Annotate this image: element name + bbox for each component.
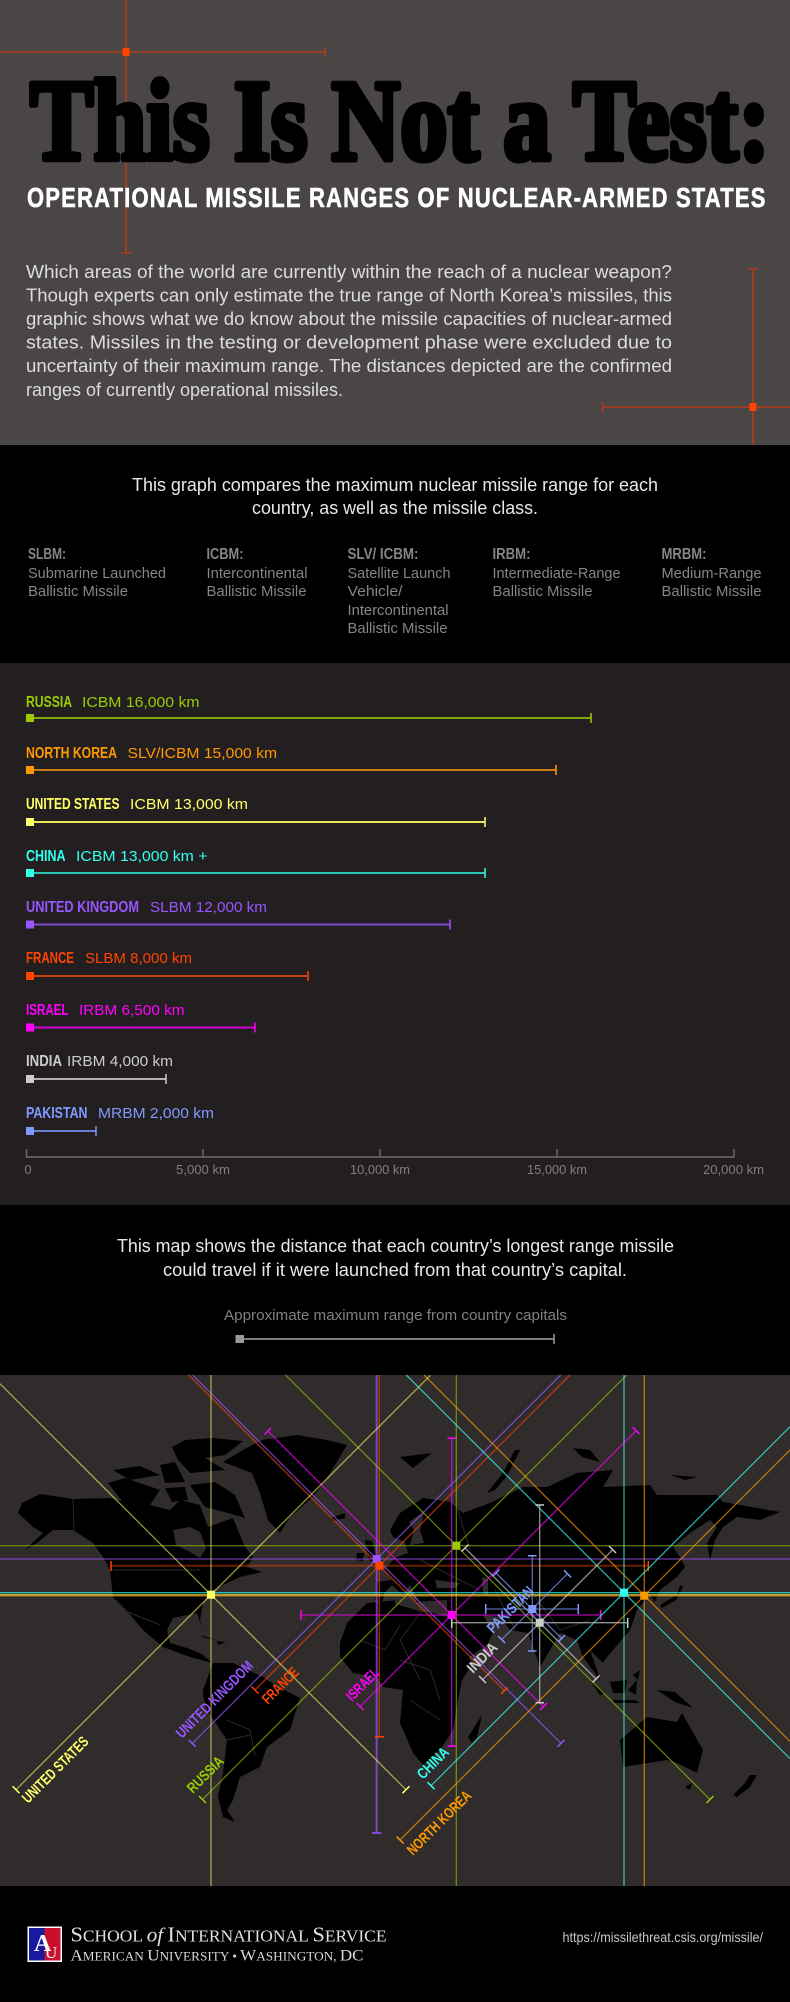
country labels: UNITED STATES [19, 1733, 92, 1807]
country labels: CHINA [414, 1744, 453, 1783]
bar: Pakistan: PAKISTAN [26, 1105, 88, 1122]
bar: India [26, 1053, 173, 1084]
chart axis: 5,000 km [176, 1162, 230, 1177]
range lines: Pakistan [486, 1556, 578, 1651]
bar: China: CHINA [26, 848, 66, 865]
bar: India: INDIA [26, 1053, 62, 1070]
bar: United Kingdom: UNITED KINGDOM [26, 899, 139, 916]
bar: China: ICBM 13,000 km + [76, 848, 208, 865]
subtitle: OPERATIONAL MISSILE RANGES OF NUCLEAR-ARMED STATES [27, 183, 765, 214]
bar: Russia: RUSSIA [26, 694, 72, 711]
logo: American University [28, 1926, 62, 1962]
range lines: France [111, 1375, 648, 1737]
map legend: Approximate maximum range from country capitals [224, 1307, 567, 1324]
legend: IRBM: Intermediate-Range [492, 565, 620, 582]
chart axis [24, 1149, 764, 1177]
legend: IRBM [492, 546, 620, 600]
chart axis: 10,000 km [350, 1162, 410, 1177]
bar: United States: ICBM 13,000 km [130, 796, 248, 813]
intro text: graphic shows what we do know about the missile capacities of nuclear-armed [26, 309, 672, 329]
legend: SLBM: SLBM: [28, 546, 66, 563]
world map silhouettes [18, 1435, 780, 1822]
panel: world map [0, 1375, 790, 1886]
legend: SLV/ICBM: Ballistic Missile [348, 620, 448, 637]
legend: SLBM: Ballistic Missile [28, 583, 128, 600]
panel: header [0, 0, 790, 445]
bar: Israel: ISRAEL [26, 1002, 69, 1019]
panel: graph intro and missile class legend [0, 445, 790, 663]
range lines: United Kingdom [0, 1375, 790, 1833]
graph intro text [132, 475, 658, 518]
legend: ICBM: ICBM: [206, 546, 244, 563]
bar: North Korea: SLV/ICBM 15,000 km [128, 745, 277, 762]
bar: United Kingdom: SLBM 12,000 km [150, 899, 267, 916]
crosshair: bottom right [602, 269, 790, 445]
legend: SLV/ICBM [348, 546, 450, 637]
country labels: ISRAEL [343, 1665, 383, 1705]
range lines: United States [0, 1375, 790, 1886]
intro text: ranges of currently operational missiles. [26, 380, 343, 400]
map intro text: could travel if it were launched from that country’s capital. [163, 1260, 627, 1280]
range lines: North Korea [0, 1375, 790, 1886]
bar: Pakistan [26, 1105, 214, 1136]
legend: IRBM: IRBM: [492, 546, 530, 563]
bar: North Korea [26, 745, 556, 775]
source url: https://missilethreat.csis.org/missile/ [562, 1929, 763, 1945]
bar: India: IRBM 4,000 km [67, 1053, 173, 1070]
legend: MRBM [662, 546, 762, 600]
panel: map intro [0, 1205, 790, 1375]
capital markers [207, 1542, 648, 1627]
bar: Israel: IRBM 6,500 km [79, 1002, 184, 1019]
legend: ICBM [206, 546, 308, 600]
legend: MRBM: MRBM: [662, 546, 706, 563]
bar: United States: UNITED STATES [26, 796, 120, 813]
chart axis: 15,000 km [527, 1162, 587, 1177]
bar: United States [26, 796, 485, 827]
country labels: RUSSIA [184, 1753, 228, 1797]
logo: American University: U [45, 1943, 57, 1962]
intro text: states. Missiles in the testing or development phase were excluded due to [26, 332, 672, 352]
bar: France [26, 950, 308, 981]
legend: SLV/ICBM: Satellite Launch [348, 565, 450, 582]
bar: North Korea: NORTH KOREA [26, 745, 117, 762]
map intro text [117, 1236, 674, 1280]
bar: China [26, 848, 485, 878]
chart axis: 20,000 km [703, 1162, 764, 1177]
legend: SLBM [28, 546, 166, 600]
map intro text: This map shows the distance that each country’s longest range missile [117, 1236, 674, 1256]
range lines: India [452, 1505, 628, 1703]
legend: MRBM: Ballistic Missile [662, 583, 762, 600]
bar: France: SLBM 8,000 km [85, 950, 192, 967]
bar: United Kingdom [26, 899, 450, 930]
legend: IRBM: Ballistic Missile [492, 583, 592, 600]
bar: Pakistan: MRBM 2,000 km [98, 1105, 214, 1122]
legend: ICBM: Intercontinental [206, 565, 308, 582]
range lines: China [0, 1375, 790, 1886]
legend: ICBM: Ballistic Missile [206, 583, 306, 600]
bar: Russia: ICBM 16,000 km [82, 694, 200, 711]
university line: AMERICAN UNIVERSITY • WASHINGTON, DC [70, 1948, 364, 1964]
graph intro text: country, as well as the missile class. [252, 498, 538, 518]
panel: footer [0, 1886, 790, 2002]
country labels: INDIA [464, 1639, 501, 1677]
bar: Israel [26, 1002, 255, 1032]
chart axis: 0 [24, 1162, 32, 1177]
map legend [224, 1307, 567, 1344]
graph intro text: This graph compares the maximum nuclear missile range for each [132, 475, 658, 495]
bar: Russia [26, 694, 591, 723]
panel: range bar chart [0, 663, 790, 1205]
legend: SLV/ICBM: SLV/ ICBM: [348, 546, 418, 563]
country labels: FRANCE [259, 1664, 303, 1708]
crosshair: top left [0, 0, 325, 253]
range lines: Israel [264, 1427, 640, 1746]
legend: MRBM: Medium-Range [662, 565, 762, 582]
legend: SLBM: Submarine Launched [28, 565, 166, 582]
legend: SLV/ICBM: Vehicle/ [348, 583, 403, 600]
school name: SCHOOL of INTERNATIONAL SERVICE [70, 1923, 386, 1947]
country labels [19, 1583, 538, 1859]
country labels: PAKISTAN [484, 1583, 538, 1637]
country labels: UNITED KINGDOM [173, 1658, 257, 1742]
country labels: NORTH KOREA [404, 1787, 475, 1859]
legend: SLV/ICBM: Intercontinental [348, 602, 448, 619]
bar: France: FRANCE [26, 950, 74, 967]
intro text [26, 262, 672, 400]
country borders [73, 1498, 590, 1755]
intro text: uncertainty of their maximum range. The distances depicted are the confirmed [26, 356, 672, 376]
logo: American University: A [34, 1931, 52, 1957]
range lines: Russia [0, 1375, 790, 1886]
intro text: Which areas of the world are currently within the reach of a nuclear weapon? [26, 262, 672, 282]
intro text: Though experts can only estimate the true range of North Korea’s missiles, this [26, 286, 672, 306]
